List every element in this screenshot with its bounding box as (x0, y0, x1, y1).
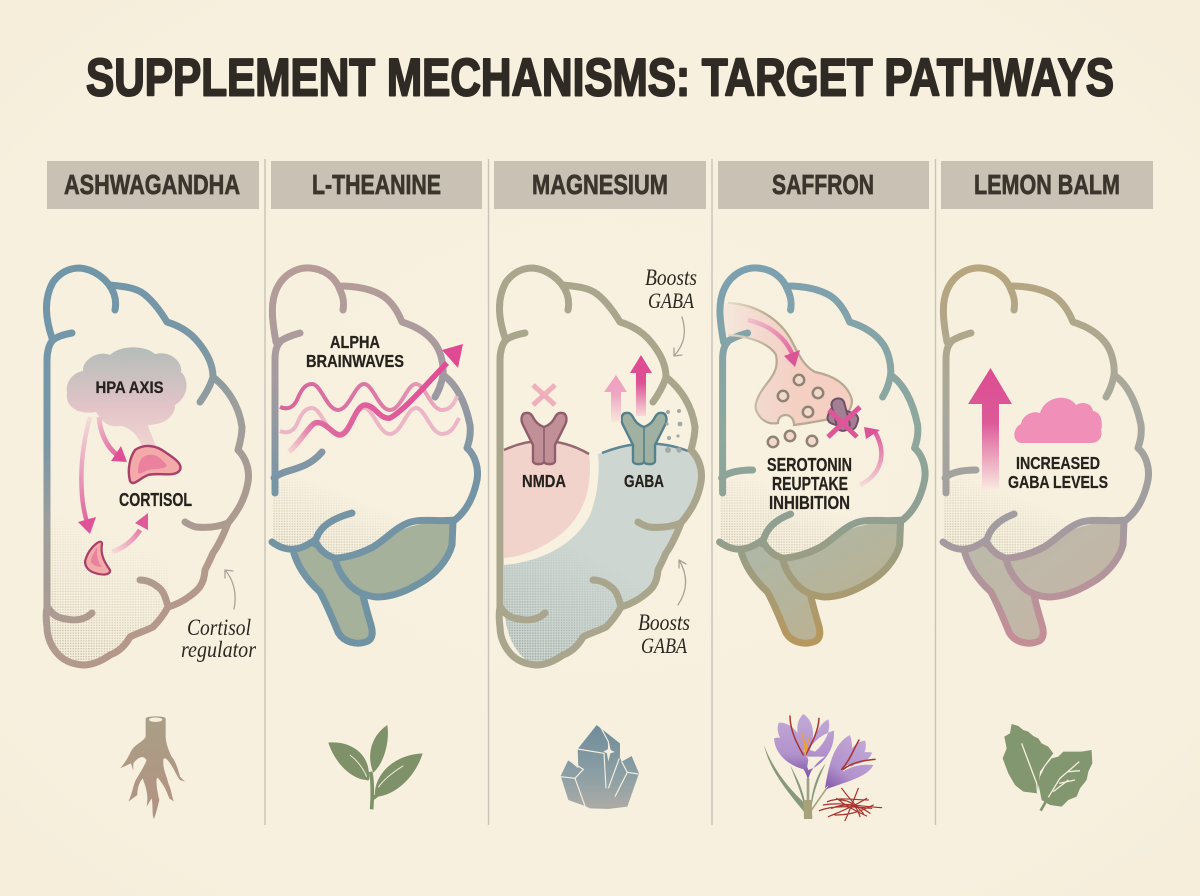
icon: magnesium crystal (561, 725, 639, 809)
HPA axis cloud (67, 347, 187, 446)
icon: ashwagandha root (120, 716, 185, 819)
icon: tea leaf (328, 725, 423, 809)
header: magnesium: MAGNESIUM (532, 169, 668, 200)
label: increased GABA levels: INCREASED (1016, 453, 1100, 473)
callout: cortisol regulator (181, 570, 257, 662)
receptor: GABA (622, 413, 666, 464)
callout: boosts GABA bottom (638, 560, 690, 658)
panel: l-theanine (271, 161, 482, 809)
icon: saffron crocus (764, 714, 882, 821)
label: serotonin reuptake inhibition: REUPTAKE (772, 474, 848, 494)
icon: lemon balm leaves (1003, 724, 1092, 811)
label: serotonin reuptake inhibition: INHIBITION (769, 493, 850, 513)
label: alpha brainwaves (306, 332, 404, 371)
header: ashwagandha (47, 161, 259, 209)
icon: blocked X (533, 385, 555, 405)
header: lemon balm (941, 161, 1153, 209)
label: increased GABA levels: GABA LEVELS (1008, 472, 1108, 492)
diagram: synapse (728, 303, 881, 485)
particles (665, 409, 682, 453)
diagram fills: NMDA and GABA zones (504, 441, 700, 665)
callout: boosts GABA bottom: GABA (641, 633, 687, 658)
arrow: gland to cortisol (112, 513, 148, 552)
header: ashwagandha: ASHWAGANDHA (64, 169, 240, 200)
arrow: axon flow (748, 320, 800, 367)
callout: boosts GABA top: GABA (648, 288, 694, 313)
adrenal gland large (129, 446, 181, 483)
reuptake transporter blocked (826, 397, 860, 437)
label: increased GABA levels (1008, 453, 1108, 492)
header: saffron: SAFFRON (772, 169, 874, 200)
arrow: GABA up strong (630, 355, 652, 416)
diagram fill: presynaptic terminal (724, 303, 852, 425)
chart: brainwaves (280, 344, 463, 452)
label: HPA AXIS: HPA AXIS (96, 378, 164, 397)
diagram: HPA axis to cortisol (67, 347, 187, 575)
arrow: GABA up pale (604, 375, 627, 422)
label: GABA: GABA (624, 471, 664, 491)
panel: saffron (718, 161, 929, 821)
panel: magnesium (494, 161, 706, 809)
receptor: NMDA (522, 413, 566, 464)
terminal outline (728, 303, 852, 425)
header: magnesium (494, 161, 706, 209)
arrow: HPA to gland large (99, 417, 127, 462)
header: l-theanine (271, 161, 482, 209)
brain: l-theanine (272, 268, 478, 643)
label: CORTISOL: CORTISOL (119, 489, 192, 510)
gland small (85, 542, 110, 575)
label: alpha brainwaves: ALPHA (330, 332, 380, 352)
callout: boosts GABA top (645, 265, 697, 356)
panel: lemon balm (941, 161, 1153, 811)
label: NMDA: NMDA (522, 471, 566, 491)
brain: lemon balm (943, 268, 1149, 643)
panel: ashwagandha (46, 161, 259, 819)
brain: ashwagandha (46, 268, 249, 665)
brain: magnesium (499, 268, 702, 665)
header: saffron (718, 161, 929, 209)
label: serotonin reuptake inhibition (767, 455, 852, 513)
header: l-theanine: L-THEANINE (312, 169, 441, 200)
arrow: HPA to gland small (78, 417, 96, 534)
callout: cortisol regulator: Cortisol (187, 615, 251, 640)
callout: boosts GABA bottom: Boosts (638, 610, 690, 635)
brain: saffron (720, 268, 925, 643)
header: lemon balm: LEMON BALM (974, 169, 1120, 200)
arrow: reuptake curve (860, 427, 881, 485)
icon: GABA cloud (1014, 398, 1102, 443)
arrow: increased GABA (968, 368, 1012, 489)
callout: boosts GABA top: Boosts (645, 265, 697, 290)
vesicles (768, 375, 823, 447)
callout: cortisol regulator: regulator (181, 637, 257, 662)
label: alpha brainwaves: BRAINWAVES (306, 351, 404, 371)
label: serotonin reuptake inhibition: SEROTONIN (767, 455, 852, 475)
